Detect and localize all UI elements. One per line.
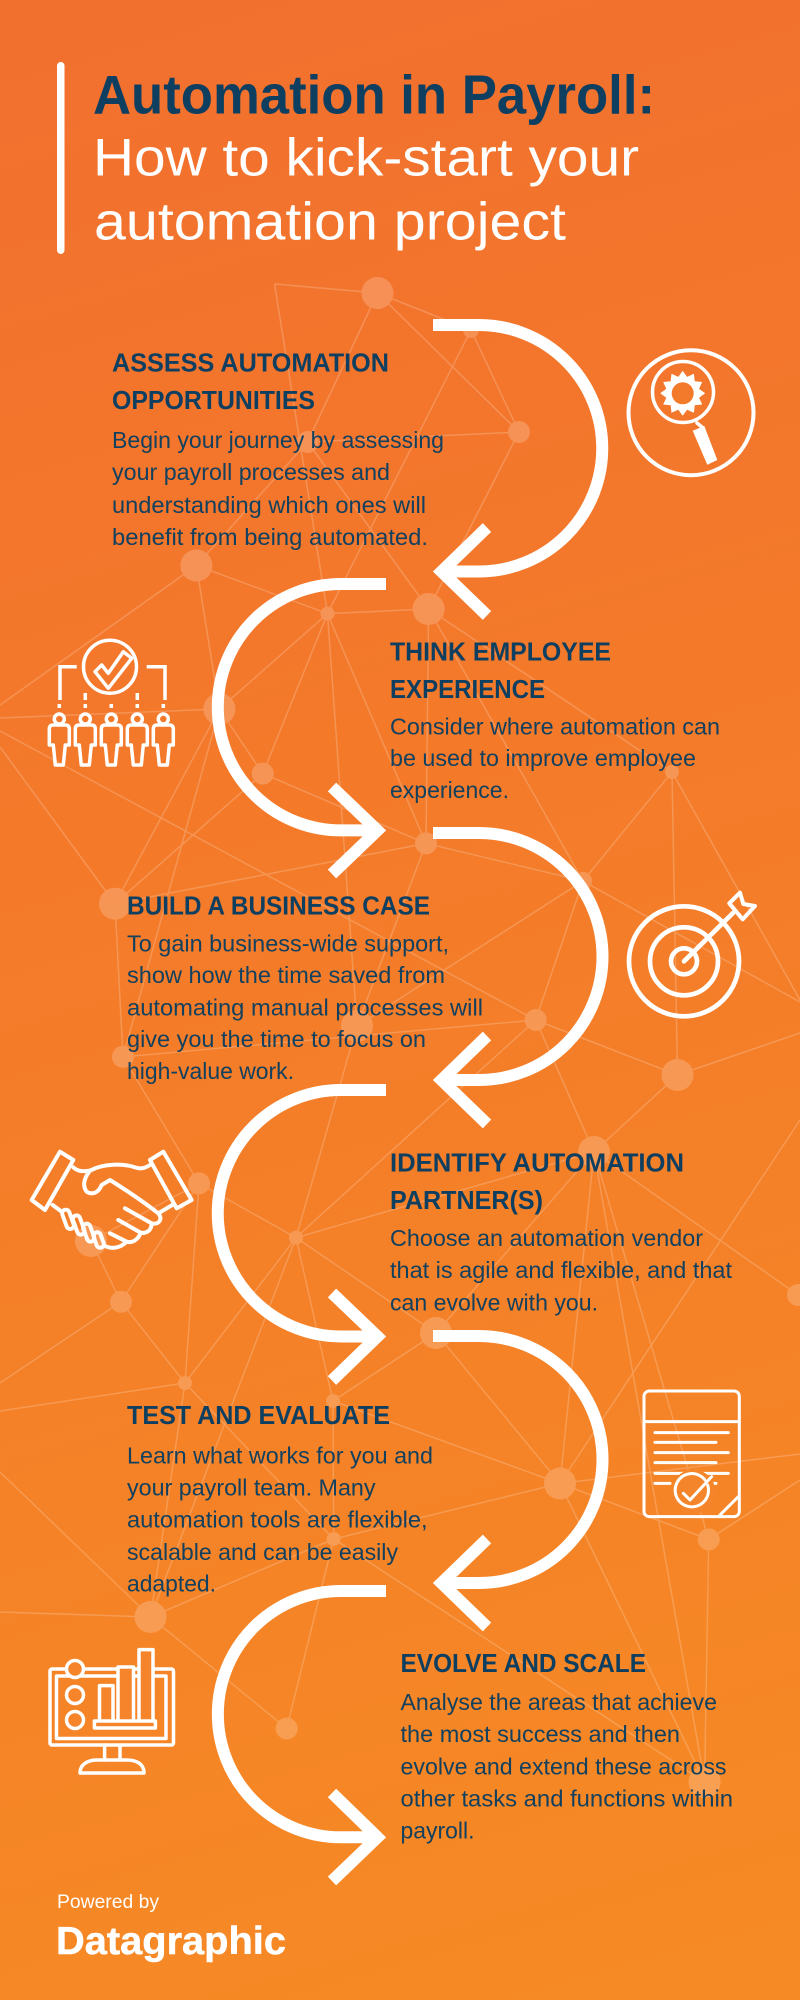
step 3: build a business case: To gain business-wide support, [127, 930, 449, 956]
step 3: build a business case: high-value work. [127, 1058, 294, 1084]
step 1: assess automation opportunities: Begin your journey by assessing [112, 427, 444, 453]
icon: team with checkmark [49, 640, 173, 765]
step 1: assess automation opportunities: ASSESS AUTOMATION [112, 350, 389, 378]
step 6: evolve and scale: Analyse the areas that achieve [400, 1689, 717, 1715]
step 2: think employee experience: THINK EMPLOYEE [390, 638, 611, 666]
step 3: build a business case [127, 893, 483, 1084]
icon: document with check [644, 1391, 739, 1517]
footer: powered by Datagraphic: Powered by [57, 1892, 159, 1913]
step 3: build a business case: give you the time to focus on [127, 1026, 426, 1052]
step 4: identify automation partners: IDENTIFY AUTOMATION [390, 1150, 684, 1178]
step 3: build a business case: automating manual processes will [127, 995, 483, 1021]
step 5: test and evaluate: scalable and can be easily [127, 1539, 398, 1565]
step 2: think employee experience: experience. [390, 777, 509, 803]
step 2: think employee experience: Consider where automation can [390, 714, 720, 740]
footer: powered by Datagraphic [56, 1892, 286, 1963]
step 4: identify automation partners: Choose an automation vendor [390, 1225, 703, 1251]
network background [0, 277, 800, 1798]
icon: magnifier with gear [628, 350, 754, 475]
step 4: identify automation partners [390, 1150, 733, 1316]
icon: target with arrow [629, 893, 755, 1016]
step 4: identify automation partners: that is agile and flexible, and that [390, 1257, 733, 1283]
arrow: step 2 to 3 [218, 584, 386, 874]
step 5: test and evaluate [127, 1402, 433, 1596]
step 2: think employee experience: EXPERIENCE [390, 676, 545, 704]
step 6: evolve and scale: other tasks and functions within [400, 1786, 733, 1812]
step 6: evolve and scale: evolve and extend these across [400, 1754, 726, 1780]
title [93, 64, 655, 251]
step 6: evolve and scale [400, 1650, 733, 1844]
step 5: test and evaluate: your payroll team. Many [127, 1475, 376, 1501]
title accent bar [57, 62, 64, 254]
step 5: test and evaluate: Learn what works for you and [127, 1442, 433, 1468]
step 1: assess automation opportunities: your payroll processes and [112, 459, 390, 485]
step 6: evolve and scale: the most success and then [400, 1721, 680, 1747]
arrow: step 1 to 2 [433, 325, 602, 616]
step 5: test and evaluate: adapted. [127, 1570, 216, 1596]
step 6: evolve and scale: payroll. [400, 1818, 474, 1844]
step 1: assess automation opportunities: understanding which ones will [112, 492, 426, 518]
step 1: assess automation opportunities [112, 350, 444, 550]
step 3: build a business case: BUILD A BUSINESS CASE [127, 893, 430, 921]
step 5: test and evaluate: TEST AND EVALUATE [127, 1402, 390, 1430]
title: automation project [94, 192, 566, 251]
step 6: evolve and scale: EVOLVE AND SCALE [400, 1650, 646, 1678]
arrow: step 5 to 6 [433, 1336, 603, 1627]
title: How to kick-start your [93, 129, 639, 188]
step 1: assess automation opportunities: OPPORTUNITIES [112, 387, 315, 415]
icon: handshake [32, 1152, 192, 1249]
arrow: step 4 to 5 [218, 1090, 386, 1380]
step 5: test and evaluate: automation tools are flexible, [127, 1507, 428, 1533]
title: Automation in Payroll: [93, 64, 655, 126]
arrow: step 6 end [218, 1591, 386, 1881]
step 2: think employee experience: be used to improve employee [390, 745, 696, 771]
step 2: think employee experience [390, 638, 720, 803]
arrow: step 3 to 4 [433, 833, 603, 1124]
footer: powered by Datagraphic: Datagraphic [56, 1920, 286, 1963]
step 4: identify automation partners: PARTNER(S) [390, 1187, 543, 1215]
step 1: assess automation opportunities: benefit from being automated. [112, 524, 428, 550]
step 4: identify automation partners: can evolve with you. [390, 1290, 598, 1316]
icon: monitor with charts [50, 1650, 174, 1773]
step 3: build a business case: show how the time saved from [127, 962, 445, 988]
